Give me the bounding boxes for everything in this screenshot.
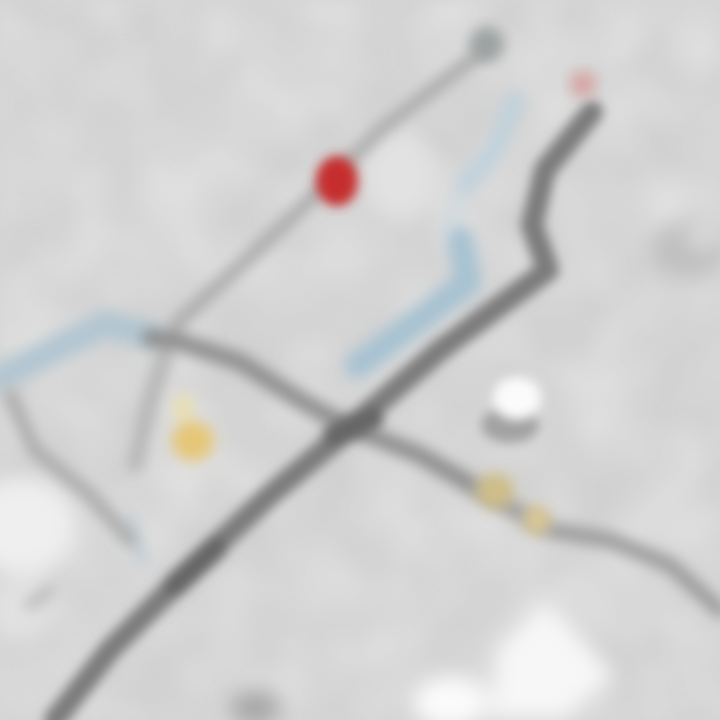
icon: yellow markers (172, 394, 551, 535)
main road (55, 112, 592, 720)
secondary roads (10, 50, 720, 610)
icon: white dome building (481, 377, 541, 443)
icon: red map pin (316, 156, 358, 206)
road junction node top (470, 27, 504, 61)
icon: pale red marker (570, 71, 596, 97)
water: river channels (0, 100, 515, 560)
